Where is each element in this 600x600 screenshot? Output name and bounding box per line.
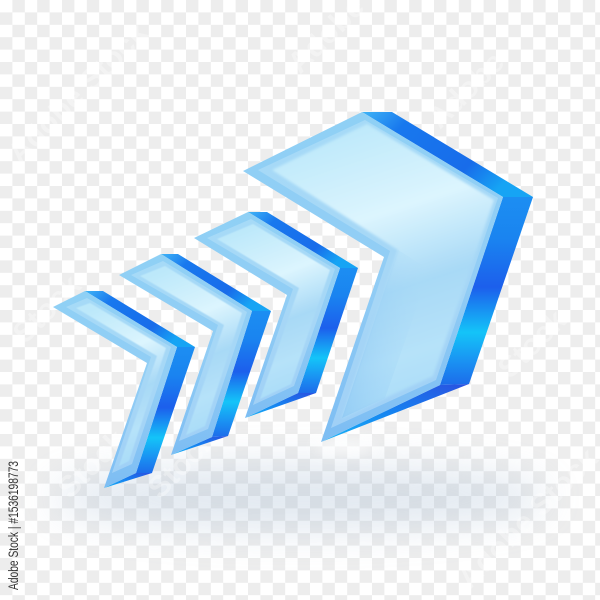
watermark: Stock <box>142 424 223 505</box>
chevron 4 face <box>243 112 503 442</box>
chevron 4 (largest) <box>243 112 533 442</box>
chevron 2 top edge <box>161 254 271 311</box>
chevron 1 bottom edge <box>104 473 152 488</box>
chevron 1 inner face <box>66 298 171 473</box>
watermark: Adobe Stock <box>2 17 155 170</box>
chevron 3 side edge <box>298 268 358 393</box>
stock credit: Adobe Stock | #1536198773 <box>6 461 21 590</box>
chevron 4 inner highlight <box>272 124 494 418</box>
chevron 4 side edge <box>440 197 533 385</box>
chevron 1 top edge <box>85 291 195 347</box>
chevron 3 <box>194 212 358 418</box>
chevron 2 inner highlight <box>140 266 242 435</box>
watermark: Adobe <box>422 46 511 135</box>
chevron 1 face <box>53 291 177 488</box>
chevron 3 bottom edge <box>245 393 316 418</box>
chevron 2 side edge <box>212 311 271 437</box>
watermark: Stock <box>492 304 573 385</box>
chevron 1 (smallest) <box>53 291 195 488</box>
watermark: Stock <box>52 424 133 505</box>
chevron 2 face <box>119 254 252 455</box>
chevron 3 inner highlight <box>217 224 330 399</box>
chevron 2 inner face <box>131 261 247 441</box>
chevron 4 top edge <box>362 112 533 197</box>
chevron 3 face <box>194 212 340 418</box>
chevron 3 inner face <box>207 219 335 405</box>
chevron 4 bottom edge <box>321 384 469 442</box>
chevron 2 <box>119 254 271 455</box>
ground shadow <box>50 441 550 531</box>
chevron 4 lower limb shade <box>342 250 430 418</box>
watermark: Stock <box>7 269 88 350</box>
chevron 3 top edge <box>248 212 358 268</box>
chevron 1 inner highlight <box>76 303 166 466</box>
chevron 1 side edge <box>136 347 195 473</box>
chevron 4 inner face <box>258 120 498 428</box>
chevron 2 bottom edge <box>171 436 228 455</box>
